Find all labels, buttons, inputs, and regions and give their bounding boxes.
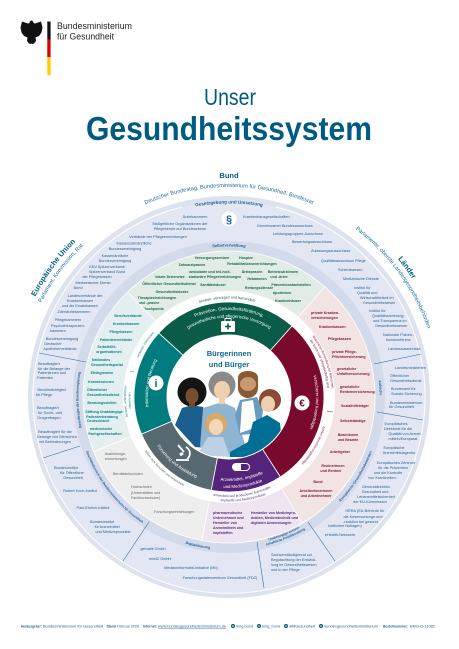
panel: information and counselling sector: Beratungsstellen	[87, 401, 117, 405]
text block: Europäische Union institutions: Gesundheit und	[362, 490, 388, 494]
wheel segment: research and education: Forschung und Ausbildung	[157, 444, 197, 478]
panel: insurers sector: Rentenversicherung	[340, 390, 375, 394]
text block: Beauftragte: für die Belange der	[38, 367, 71, 371]
text block: Geschäftsbereich and digitalisation: Robert Koch-Institut	[63, 489, 98, 493]
wheel segment: prevention and care	[160, 302, 292, 355]
panel: prevention and care sector: Öffentlicher Gesundheitsdienst	[142, 281, 197, 286]
text block: Europäische Union institutions: Lebensmittelsicherheit	[357, 495, 396, 499]
heading: Bund: Bund	[219, 171, 239, 180]
text block: Geschäftsbereich and digitalisation: Bundesinstitut	[54, 466, 79, 470]
panel: prevention and care sector: Hospize	[239, 256, 253, 260]
icon: first-aid case	[221, 318, 235, 332]
text block: Bund and self-governance left: Verbände der Pflegeeinrichtungen	[129, 235, 187, 239]
text block: Bund and self-governance left: Psychotherapeuten-	[51, 324, 86, 328]
text block: Länder institutions: Medizinische Dienste	[343, 277, 379, 281]
text block: Europäische Union institutions: Europäisches	[384, 422, 408, 426]
panel: information and counselling sector: Berufsverbände	[114, 314, 142, 318]
text block: Länder institutions: Gesundheitsdienst	[390, 379, 422, 383]
panel: insurers sector: Rentnerinnen	[321, 464, 345, 468]
panel: medicines sector: Hersteller von Medizinpro-	[251, 511, 297, 515]
panel: insurers sector: Krankenkassen	[319, 325, 346, 329]
panel: prevention and care sector: Krankenhäuser	[275, 299, 302, 303]
heading: Bund	[144, 171, 314, 204]
text block: Europäische Union institutions: für die Prävention	[378, 466, 408, 470]
text block: Geschäftsbereich and digitalisation: mio42 GmbH	[149, 557, 171, 561]
text block: Sachverständigenrat	[271, 553, 317, 572]
band captions: bilden aus, forschen und entwickeln	[145, 450, 184, 486]
text block: Bund and self-governance left: Bund	[74, 286, 82, 290]
text block: Bund and self-governance left: Bundesvereinigung	[46, 337, 78, 341]
panel: information and counselling sector: Gesundheitsportal	[91, 363, 123, 367]
text block: Bund and self-governance left: Kassenzahnärztliche	[116, 242, 152, 246]
footer: Februar 2026	[117, 624, 139, 628]
text block: Länder institutions: Gemeinsamer Bundesausschuss	[257, 224, 313, 228]
band captions: beraten, versorgen und behandeln	[198, 296, 256, 303]
panel: prevention and care sector: Rehabilitationseinrichtungen	[227, 262, 277, 266]
band captions: die krank oder pflegebedürftig sind	[310, 340, 330, 388]
text block: Beauftragte	[36, 362, 77, 444]
center heading: und Bürger	[209, 360, 249, 369]
center circle	[166, 334, 292, 460]
text block: Länder institutions: Zulassungsausschüsse	[311, 249, 350, 253]
wheel segment: insurers	[263, 326, 324, 476]
panel: insurers sector: Pflichtversicherung	[332, 355, 366, 359]
panel: insurers sector: Beamtinnen	[338, 433, 358, 437]
footer	[21, 624, 435, 628]
outer ring labels	[76, 200, 382, 550]
heading: Europäische Union: Europäische Union	[31, 240, 76, 296]
text block: Länder institutions: und Transparenz im	[373, 319, 407, 323]
text block: Beauftragte: mit Behinderungen	[39, 440, 71, 444]
text block: Länder institutions: Bundesamt für	[391, 387, 416, 391]
title: Gesundheitssystem	[86, 110, 372, 147]
white band	[123, 291, 335, 503]
text block: Länder institutions: Bundesministerium	[390, 401, 422, 405]
panel: prevention and care sector: Versorgungszentren	[195, 256, 229, 260]
text block: Bund and self-governance left: Deutscher	[44, 342, 62, 346]
panel: medicines sector: Arzneimitteln und	[213, 526, 243, 530]
panel: information and counselling sector: Ethikgremien	[91, 371, 113, 375]
footer: bundesgesundheitsministerium	[324, 624, 378, 628]
text block: Geschäftsbereich and digitalisation: Forschungsdatenzentrum Gesundheit (FDZ)	[183, 576, 258, 580]
title	[86, 84, 372, 147]
text block: Länder institutions: Krankenhausgesellschaften	[243, 215, 290, 219]
icon: euro	[294, 396, 310, 410]
panel: insurers sector: versicherungen	[311, 316, 338, 320]
panel: insurers sector: Sozialhilfeträger	[341, 404, 370, 408]
heading: Bund: Deutscher Bundestag, Bundesministerium für Gesundheit, Bundesrat	[144, 182, 314, 204]
text block: Bund and self-governance left: Pflegekammern	[55, 318, 81, 322]
text block: Geschäftsbereich and digitalisation	[54, 466, 258, 580]
panel: insurers sector: Pflegekassen	[328, 337, 351, 341]
panel: insurers sector: Selbstständige	[340, 419, 366, 423]
outer ring labels: Aufsicht	[378, 380, 382, 395]
panel: information and counselling sector: Stiftung Unabhängige	[85, 410, 123, 414]
text block: Europäische Union institutions	[325, 422, 422, 537]
text block: Bund and self-governance left: Spitzenverband Bund	[89, 270, 125, 274]
text block: Bund and self-governance left: kammern	[50, 329, 66, 333]
center heading: Bürgerinnen	[207, 349, 252, 358]
footer: bmg.bund	[236, 624, 253, 628]
text block: Sachverständigenrat: lung im Gesundheitswesen	[271, 563, 317, 567]
panel: insurers sector: und Beamte	[338, 438, 358, 442]
panel: research and education sector: (Universitäten und	[131, 491, 160, 495]
text block: Länder institutions: für Gesundheit	[389, 405, 415, 409]
panel: prevention and care sector	[128, 251, 325, 397]
panel: prevention and care sector: stationäre Pflegeeinrichtungen	[189, 275, 241, 279]
footer: bmg_bund	[262, 624, 280, 628]
text block: Europäische Union institutions: der EU-Kommission	[353, 500, 387, 504]
footer: Bestellnummer:	[383, 624, 408, 628]
panel: information and counselling sector: Gesundheitsdienst	[87, 393, 120, 397]
outer ring labels: Beauftragte der Bundesregierung	[76, 372, 82, 428]
text block: Länder institutions: Soziale Sicherung	[391, 392, 422, 396]
wheel segment: information and counselling	[134, 333, 183, 434]
panel: prevention and care sector: Sanitätshäuser	[200, 283, 226, 287]
outer ring labels: Europäische Gesundheitsbehörden	[339, 451, 372, 502]
text block: Länder institutions: Gesundheitswesen	[375, 324, 407, 328]
text block: Europäische Union institutions: heitlichen Notlagen)	[328, 524, 363, 528]
text block: Geschäftsbereich and digitalisation: Paul-Ehrlich-Institut	[77, 506, 110, 510]
band captions: Impfstoffe und Medizinprodukte	[220, 494, 266, 502]
heading: Europäische Union: Parlament, Kommission, Rat	[38, 244, 84, 302]
panel: information and counselling sector: medizinische	[90, 427, 112, 431]
panel: research and education sector: Fachhochschulen)	[131, 496, 160, 500]
text block: Länder institutions: Leistungsgruppen-Ausschuss	[273, 232, 323, 236]
panel: medicines sector: Unternehmen und	[213, 516, 244, 520]
wheel segment: prevention and care: Prävention, Gesundheitsförderung,	[194, 306, 263, 318]
outer ring labels: Unabhängige wissen-	[268, 527, 300, 540]
panel: information and counselling sector: Patientenberatung	[86, 415, 118, 419]
wheel segment: medicines: Arzneimittel, Impfstoffe	[220, 472, 263, 481]
text block: Länder institutions	[243, 215, 426, 409]
icon: paragraph: §	[226, 214, 232, 226]
panel: insurers sector: private Pflege-	[332, 350, 358, 354]
panel: insurers sector: Bund	[313, 480, 323, 484]
panel: insurers sector: Arbeitgeber	[330, 450, 351, 454]
wheel segment: medicines	[212, 450, 280, 492]
icon: info	[148, 376, 164, 390]
panel: prevention and care sector: Rettungsdienste	[245, 286, 273, 290]
wheel segment: medicines: und Medizinprodukte	[224, 480, 262, 488]
text block: Sachverständigenrat: und in der Pflege	[271, 568, 300, 572]
text block: Bund and self-governance left: Landesverbände der	[68, 294, 103, 298]
logo: Bundesministerium für Gesundheit: für Gesundheit	[57, 32, 114, 42]
text block: Geschäftsbereich and digitalisation: gematik GmbH	[140, 547, 166, 551]
text block: Europäische Union institutions: Europäisches Zentrum	[377, 461, 415, 465]
outer ring labels: Gesetzgebung und Umsetzung	[195, 200, 263, 208]
icon: euro: €	[299, 398, 305, 410]
panel: information and counselling sector: Nationales	[92, 358, 110, 362]
text block: Länder institutions: Institut für	[369, 309, 386, 313]
footer: Bundesministerium für Gesundheit	[43, 624, 104, 628]
panel: information and counselling sector: Krankenkassen	[113, 322, 139, 326]
wheel segment: research and education	[142, 421, 218, 490]
text block: Länder institutions: Qualität und	[357, 291, 377, 295]
text block: Europäische Union institutions: HERA (EU-Behörde für	[345, 509, 385, 513]
text block: Beauftragte: Patienten	[37, 376, 53, 380]
text block: Bund and self-governance left: der Pflegekassen	[82, 275, 112, 279]
panel: research and education sector	[94, 397, 229, 540]
panel: prevention and care sector: Hebammen	[247, 277, 267, 281]
text block: Europäische Union institutions: von Krankheiten	[368, 476, 396, 480]
panel: research and education sector: Forschungseinrichtungen	[154, 510, 194, 514]
wheel segment: prevention and care: gesundheitliche und pflegerische Versorgung	[187, 314, 271, 330]
text block: Bund and self-governance left: Medizinischer Dienst	[75, 281, 111, 285]
footer: www.bundesgesundheitsministerium.de	[158, 624, 226, 628]
panel: information and counselling sector: Fachgesellschaften	[88, 432, 122, 436]
panel: information and counselling sector: Deutschland	[87, 419, 109, 423]
panel: prevention and care sector: und -ärzte	[270, 275, 288, 279]
panel: information and counselling sector: Pflegekassen	[110, 330, 132, 334]
title: Unser	[204, 84, 256, 110]
wheel segment: information and counselling: Information und Beratung	[145, 359, 158, 407]
panel: prevention and care sector: Gesundheitskioske	[156, 290, 188, 294]
panel: insurers sector: private Kranken-	[311, 311, 340, 315]
text block: Länder institutions: tionskonferenz	[386, 338, 411, 342]
band captions: finanzieren Behandlung für Menschen,	[312, 336, 334, 389]
text block: Länder institutions: Bewertungsausschüsse	[292, 240, 332, 244]
text block: Bund and self-governance left: Apothekerverbände	[43, 347, 77, 351]
panel: medicines sector: Hersteller von	[213, 521, 237, 525]
text block: Bund and self-governance left: Zahnärztekammern	[58, 310, 90, 314]
panel: insurers sector	[229, 287, 375, 523]
text block: Europäische Union institutions: -reaktion bei gesund-	[343, 520, 380, 524]
outer ring labels: Digitalisierung	[186, 541, 210, 550]
text block: Beauftragte: für Sucht- und	[38, 411, 62, 415]
footer: Herausgeber:	[21, 624, 42, 628]
text block: Europäische Union institutions: Europäische	[383, 446, 405, 450]
panel: insurers sector: und Arbeitnehmer	[301, 494, 332, 498]
footer: Stand	[106, 624, 117, 628]
panel: research and education sector: Berufsfachschulen	[113, 472, 143, 476]
text block: Beauftragte: Patientinnen und	[38, 371, 66, 375]
panel: insurers sector: Unfallversicherung	[337, 372, 370, 376]
text block: Geschäftsbereich and digitalisation: Bundesinstitut	[90, 520, 115, 524]
circular diagram backdrop	[28, 196, 430, 598]
panel: prevention and care sector: Betriebsärztinnen	[268, 270, 298, 274]
text block: Geschäftsbereich and digitalisation: Gesundheit	[63, 476, 84, 480]
text block: Länder institutions: Wirtschaftlichkeit im	[360, 296, 394, 300]
outer ring labels: schaftliche Politikberatung	[266, 528, 306, 546]
text block: Bund and self-governance left: Krankenkassen	[67, 299, 93, 303]
icon: paragraph	[222, 212, 236, 226]
band captions: zahlen Versicherungsbeiträge	[302, 426, 325, 464]
panel: medicines sector: digitalen Anwendungen	[251, 521, 291, 525]
panel: prevention and care sector: Präventionsfachstellen	[271, 283, 311, 287]
panel: research and education sector: Hochschulen	[131, 485, 152, 489]
text block: Beauftragte: Beauftragte/r für die	[38, 430, 72, 434]
wheel segment: insurers: Versicherer und Kostenträger	[310, 374, 319, 430]
text block: Europäische Union institutions: und die Kontrolle	[374, 471, 402, 475]
icon: microscope	[176, 445, 190, 460]
text block: Beauftragte: Beauftragte/r	[38, 362, 61, 366]
panel: prevention and care sector: Zahnarztpraxen	[179, 263, 205, 267]
text block: Europäische Union institutions: Generaldirektion	[362, 485, 390, 489]
panel: insurers sector: und Rentner	[320, 469, 342, 473]
text block: Beauftragte: Beauftragte/r	[37, 406, 60, 410]
footer: Internet:	[143, 624, 157, 628]
text block: Bund and self-governance left: Pflegeberufe auf Bundesebene	[154, 227, 206, 231]
panel: research and education sector: Ausbildungs-	[105, 452, 127, 456]
band captions: beraten, unterstützen,	[124, 385, 128, 418]
text block: Länder institutions: Landesausschüsse	[388, 347, 421, 351]
panel: information and counselling sector: Selbsthilfe-	[97, 345, 117, 349]
panel: information and counselling sector: Patientenverbände	[100, 338, 132, 342]
panel: information and counselling sector: Öffentlicher	[87, 387, 108, 392]
center heading	[207, 349, 252, 369]
text block: Länder institutions: Nationale Präven-	[383, 333, 414, 337]
band captions: entwickeln und produzieren Arzneimittel,	[214, 486, 271, 498]
text block: Bund and self-governance left: Maßgebliche Organisationen der	[152, 222, 208, 226]
text block: Geschäftsbereich and digitalisation: und Medizinprodukte	[95, 530, 131, 534]
logo: Bundesministerium für Gesundheit	[20, 20, 132, 75]
panel: information and counselling sector: organisationen	[96, 350, 122, 354]
outer ring labels: Selbstverwaltung	[212, 244, 246, 248]
panel: prevention and care sector: lokale Ärztenetze	[155, 275, 185, 279]
text block: Länder institutions: Qualitätsausschuss Pflege	[321, 259, 366, 263]
text block: Beauftragte: für Pflege	[36, 393, 52, 397]
text block: Sachverständigenrat: Begutachtung der Entwick-	[271, 558, 317, 562]
band captions: vertreten Interessen	[136, 332, 154, 358]
text block: Europäische Union institutions: die Krisenvorsorge und	[343, 515, 383, 519]
text block: Beauftragte: Drogenfragen	[37, 416, 61, 420]
panel: prevention and care sector: Checkpoints	[142, 307, 164, 311]
panel: information and counselling sector	[83, 292, 229, 452]
text block: Bund and self-governance left	[43, 215, 208, 351]
text block: Bund and self-governance left: und die Ersatzkassen	[62, 304, 98, 308]
logo: Bundesministerium für Gesundheit: Bundesministerium	[57, 21, 132, 31]
footer: BMGesundheit	[290, 624, 316, 628]
text block: Europäische Union institutions: Direktorat für die	[384, 427, 412, 431]
outer ring labels: Geschäftsbereich des Bundesministeriums für Gesundheit	[86, 451, 144, 524]
text block: Bund and self-governance left: Ärztekammern	[183, 215, 207, 219]
band captions: informieren	[128, 392, 132, 409]
text block: Sachverständigenrat: Sachverständigenrat zur	[271, 553, 313, 557]
footer: BMG-G-11082	[410, 624, 435, 628]
text block: Länder institutions: Institut für	[354, 286, 371, 290]
icon: info: i	[154, 378, 158, 390]
text block: Europäische Union institutions: eHealth-Netzwerk	[325, 533, 355, 537]
panel: prevention and care sector: Apotheken	[273, 291, 291, 295]
panel: medicines sector	[202, 397, 302, 543]
panel: insurers sector: gesetzliche	[340, 385, 359, 389]
text block: Bund and self-governance left: Kassenärztliche	[102, 254, 128, 258]
panel: prevention and care sector: Therapieeinrichtungen	[138, 296, 176, 300]
panel: prevention and care sector: Ärztepraxen	[242, 270, 262, 274]
text block: Geschäftsbereich and digitalisation: für Öffentliche	[60, 471, 84, 475]
text block: Länder institutions: Öffentlicher	[390, 374, 410, 378]
panel: prevention and care sector: und -praxen	[139, 301, 159, 305]
panel: information and counselling sector: Kommissionen	[88, 380, 114, 384]
text block: Beauftragte: Bevollmächtigte/r	[37, 388, 67, 392]
text block: Länder institutions: Schiedswesen	[338, 268, 362, 272]
text block: Bund and self-governance left: GKV-Spitzenverband/	[89, 265, 126, 269]
text block: Länder institutions: Gesundheitswesen	[363, 301, 395, 305]
text block: Europäische Union institutions: Arzneimittelagentur	[383, 451, 416, 455]
text block: Europäische Union institutions: Qualität von Arznei-	[388, 432, 422, 436]
panel: research and education sector: einrichtungen	[105, 457, 127, 461]
text block: Länder institutions: Landesministerien	[395, 366, 426, 370]
panel: prevention and care sector: ambulante und teil-/voll-	[189, 270, 231, 274]
text block: Europäische Union institutions: mitteln/Europarat	[389, 437, 418, 441]
heading: Länder: Länder	[398, 256, 416, 278]
text block: Geschäftsbereich and digitalisation: Medizininformatik-Initiative (MII)	[164, 566, 219, 570]
text block: Länder institutions: Qualitätssicherung	[372, 314, 403, 318]
text block: Bund and self-governance left: Bundesvereinigung	[99, 259, 131, 263]
panel: insurers sector: gesetzliche	[337, 367, 356, 371]
heading: Länder: Parlamente, oberste Landesgesundheitsbehörden	[356, 226, 430, 328]
text block: Bund and self-governance left: Bundesvereinigung	[109, 247, 141, 251]
panel: insurers sector: Arbeitnehmerinnen	[300, 489, 332, 493]
text block: Beauftragte: Belange von Menschen	[37, 435, 77, 439]
icon: pill	[232, 463, 250, 471]
panel: medicines sector: dukten, Medizintechnik und	[251, 516, 298, 520]
text block: Geschäftsbereich and digitalisation: für Arzneimittel	[94, 525, 120, 529]
panel: medicines sector: Impfstoffen	[213, 531, 233, 535]
illustration: people	[175, 371, 281, 457]
band captions	[124, 296, 334, 502]
panel: medicines sector: pharmazeutische	[213, 511, 242, 515]
